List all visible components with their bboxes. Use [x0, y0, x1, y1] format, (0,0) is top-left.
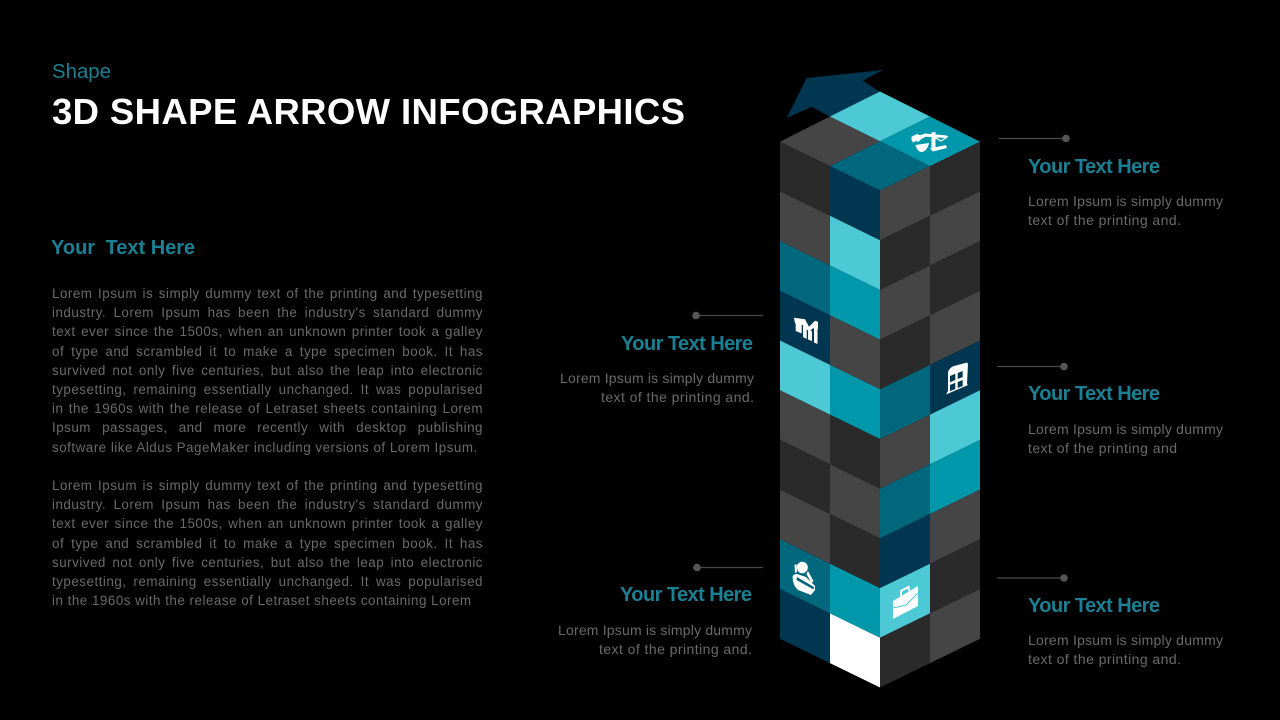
body paragraph 2: Lorem Ipsum is simply dummy text of the printing and typesetting	[52, 478, 483, 493]
callout: middle left	[560, 312, 763, 405]
left section heading: Text Here	[106, 237, 195, 259]
body paragraph 1	[52, 286, 483, 455]
callout: top right: Your Text Here	[1028, 156, 1160, 178]
callout: bottom right: Lorem Ipsum is simply dummy	[1028, 632, 1223, 648]
callout: bottom left: text of the printing and.	[599, 641, 752, 657]
icon: person at desk	[792, 562, 815, 595]
body paragraph 1: Ipsum passages, and more recently with desktop publishing	[52, 420, 483, 435]
body paragraph 1: industry. Lorem Ipsum has been the industry's standard dummy	[52, 305, 483, 320]
callout: bottom left: Lorem Ipsum is simply dummy	[558, 622, 752, 638]
body paragraph 1: Lorem Ipsum is simply dummy text of the printing and typesetting	[52, 286, 483, 301]
callout: top right	[999, 135, 1223, 228]
tower: 3D shape	[780, 92, 980, 688]
callout: middle right	[997, 363, 1223, 456]
callout: middle left: Lorem Ipsum is simply dummy	[560, 370, 754, 386]
body paragraph 2	[52, 478, 483, 608]
body paragraph 2: of type and scrambled it to make a type specimen book. It has	[52, 536, 483, 551]
body paragraph 1: in the 1960s with the release of Letraset sheets containing Lorem	[52, 401, 483, 416]
body paragraph 2: in the 1960s with the release of Letraset sheets containing Lorem	[52, 593, 472, 608]
icon: chart	[794, 318, 818, 344]
body paragraph 1: text ever since the 1500s, when an unknown printer took a galley	[52, 324, 483, 339]
callout: bottom right	[997, 574, 1223, 667]
body paragraph 1: survived not only five centuries, but also the leap into electronic	[52, 363, 483, 378]
subtitle: Shape	[52, 61, 111, 83]
callout: top right: Lorem Ipsum is simply dummy	[1028, 193, 1223, 209]
body paragraph 1: typesetting, remaining essentially unchanged. It was popularised	[52, 382, 483, 397]
callout: middle right: text of the printing and	[1028, 440, 1177, 456]
callout: middle right: Your Text Here	[1028, 383, 1160, 405]
right face	[880, 142, 980, 687]
callout: bottom right: text of the printing and.	[1028, 651, 1181, 667]
callout: top right: text of the printing and.	[1028, 212, 1181, 228]
body paragraph 1: software like Aldus PageMaker including versions of Lorem Ipsum.	[52, 440, 478, 454]
body paragraph 1: of type and scrambled it to make a type specimen book. It has	[52, 344, 483, 359]
left face	[780, 142, 880, 687]
title: 3D SHAPE ARROW INFOGRAPHICS	[52, 91, 685, 132]
body paragraph 2: industry. Lorem Ipsum has been the industry's standard dummy	[52, 497, 483, 512]
body paragraph 2: text ever since the 1500s, when an unknown printer took a galley	[52, 516, 483, 531]
callout: middle left: Your Text Here	[621, 333, 753, 355]
top face	[780, 92, 980, 190]
callout: middle right: Lorem Ipsum is simply dummy	[1028, 421, 1223, 437]
body paragraph 2: survived not only five centuries, but also the leap into electronic	[52, 555, 483, 570]
icon: scales	[911, 132, 947, 152]
callout: bottom left	[558, 564, 763, 657]
left section heading: Your	[51, 237, 95, 259]
callout: bottom right: Your Text Here	[1028, 595, 1160, 617]
icon: briefcase	[893, 586, 918, 619]
callout: bottom left: Your Text Here	[620, 584, 752, 606]
icon: building	[946, 362, 968, 394]
callout: middle left: text of the printing and.	[601, 389, 754, 405]
body paragraph 2: typesetting, remaining essentially unchanged. It was popularised	[52, 574, 483, 589]
arrow on top of tower	[787, 70, 883, 118]
